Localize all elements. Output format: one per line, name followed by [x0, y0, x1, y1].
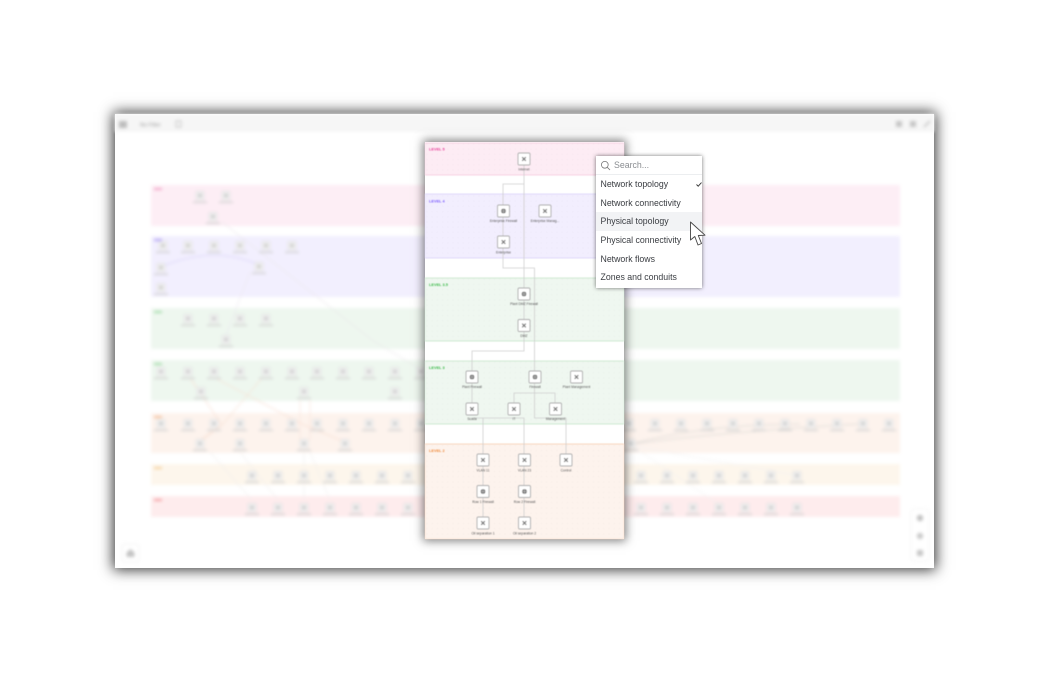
node: VLAN 23	[518, 454, 531, 472]
node: Enterprise Manag...	[531, 205, 559, 223]
node: Enterprise	[496, 236, 511, 254]
option: Zones and conduits: Zones and conduits	[600, 272, 677, 282]
node: Oil separation 2: Oil separation 2	[513, 532, 536, 536]
panel: level 5	[425, 143, 624, 175]
node: Internet	[518, 153, 530, 172]
connections	[472, 165, 566, 517]
node: Row 1 Firewall	[472, 486, 494, 504]
node: Plant DMZ Firewall: Plant DMZ Firewall	[510, 302, 538, 306]
option: Network topology (selected): Network topology	[600, 179, 668, 189]
toolbar: No Filter	[140, 122, 161, 128]
option: Network connectivity: Network connectivity	[600, 198, 681, 208]
node: Internet: Internet	[518, 168, 530, 172]
node: IT: IT	[513, 417, 515, 421]
node: Enterprise Firewall	[490, 205, 517, 223]
home button	[122, 544, 139, 562]
node: Plant Management: Plant Management	[563, 385, 590, 389]
panel: level 5: LEVEL 5	[429, 146, 446, 152]
node: DMZ	[518, 320, 530, 338]
option: Physical topology (hovered)	[596, 212, 702, 231]
node: Scada	[466, 403, 478, 421]
zoom controls	[911, 509, 929, 561]
node: Enterprise: Enterprise	[496, 250, 511, 254]
panel: level 3: LEVEL 3	[429, 365, 446, 370]
node: IT	[508, 403, 520, 421]
panel: level 3.5	[425, 278, 624, 341]
panel: level 4	[425, 194, 624, 258]
node: Row 2 Firewall: Row 2 Firewall	[514, 500, 536, 504]
node: Plant DMZ Firewall	[510, 288, 538, 306]
panel: level 3.5: LEVEL 3.5	[429, 282, 449, 287]
node: Row 1 Firewall: Row 1 Firewall	[472, 500, 494, 504]
node: Oil separation 1	[471, 517, 495, 536]
node: VLAN 11	[477, 454, 490, 472]
option: Network flows: Network flows	[600, 254, 655, 264]
node: VLAN 11: VLAN 11	[477, 468, 490, 472]
node: Management: Management	[546, 417, 565, 421]
node: VLAN 23: VLAN 23	[518, 468, 531, 472]
option: Network topology (selected)	[600, 179, 702, 189]
background connections	[163, 222, 860, 505]
foreground level panel card	[425, 142, 624, 539]
node: DMZ: DMZ	[520, 334, 528, 338]
icon: mouse cursor	[690, 222, 706, 246]
node: Row 2 Firewall	[514, 486, 536, 504]
option: Physical connectivity: Physical connectivity	[600, 235, 681, 245]
node: Enterprise Manag...: Enterprise Manag...	[531, 219, 559, 223]
background bands	[151, 185, 900, 517]
level diagram	[424, 142, 624, 540]
background nodes	[154, 192, 896, 515]
node: Enterprise Firewall: Enterprise Firewall	[490, 219, 517, 223]
dropdown menu	[596, 156, 702, 288]
panel: level 2	[425, 444, 624, 539]
toolbar	[115, 114, 934, 132]
panel: level 3	[425, 361, 624, 424]
search field	[596, 156, 702, 174]
node: Control	[560, 454, 572, 472]
node: Firewall	[529, 371, 541, 389]
node: Plant Firewall: Plant Firewall	[462, 385, 482, 389]
node: Oil separation 2	[513, 517, 536, 536]
application window	[115, 114, 934, 568]
node: Plant Firewall	[462, 371, 482, 389]
option: Physical topology (hovered): Physical topology	[600, 216, 669, 226]
node: Firewall: Firewall	[529, 385, 541, 389]
node: Plant Management	[563, 371, 590, 389]
search field: Search...	[614, 160, 649, 170]
node: Scada: Scada	[467, 417, 477, 421]
node: Control: Control	[561, 468, 572, 472]
node: Management	[546, 403, 565, 421]
node: Oil separation 1: Oil separation 1	[471, 532, 495, 536]
panel: level 4: LEVEL 4	[429, 198, 446, 204]
panel: level 2: LEVEL 2	[429, 448, 446, 453]
